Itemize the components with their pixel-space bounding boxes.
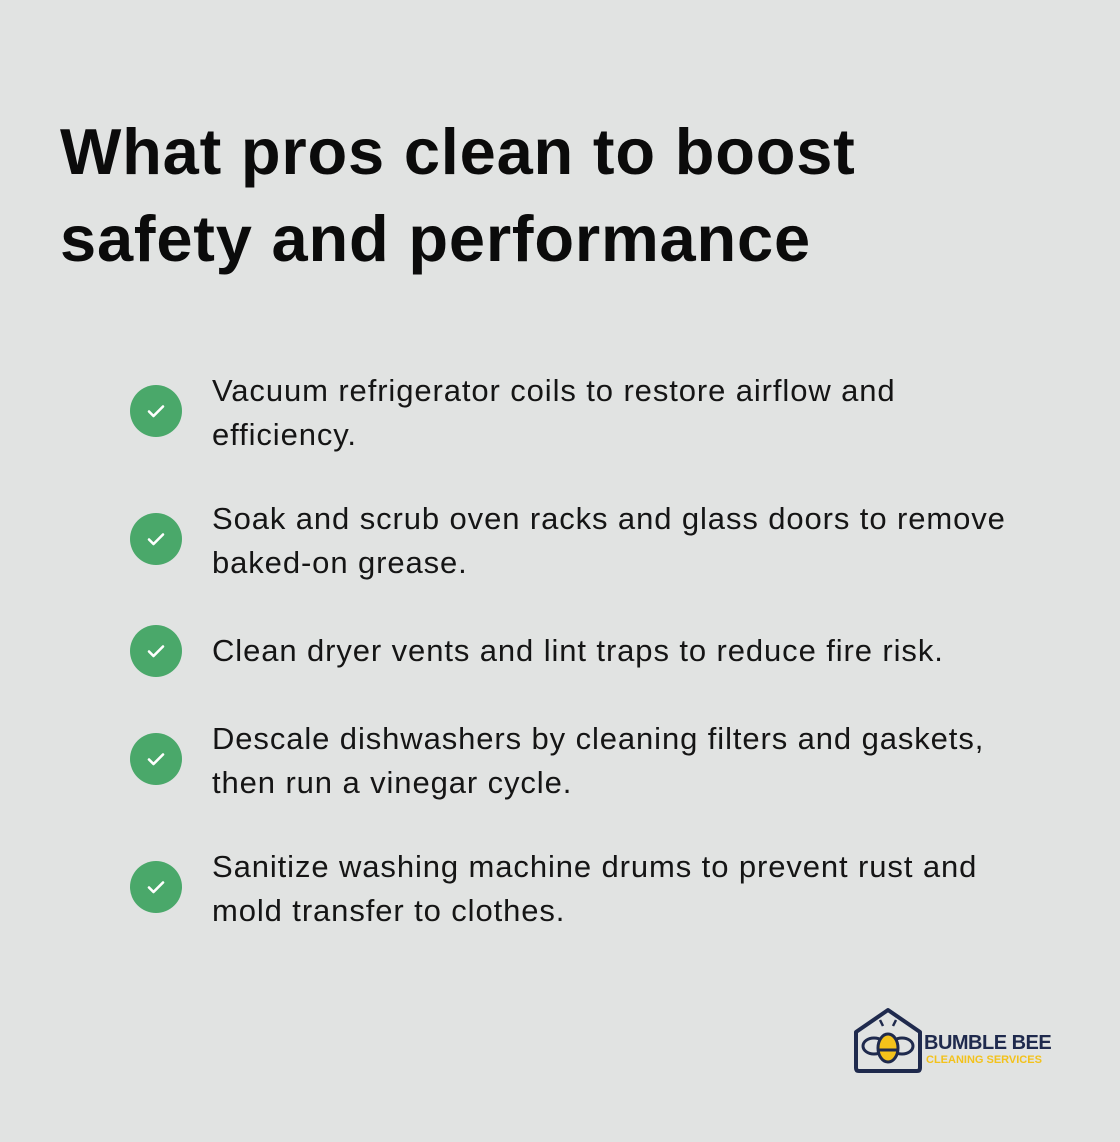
text: Soak and scrub oven racks and glass doors to remove: [212, 501, 1006, 536]
item 4: [130, 721, 984, 800]
brand text: BUMBLE BEE: [924, 1032, 1051, 1054]
icon: check: [130, 625, 182, 677]
title: What pros clean to boost: [60, 115, 856, 188]
title: safety and performance: [60, 202, 811, 275]
icon: check: [130, 513, 182, 565]
text: Vacuum refrigerator coils to restore airflow and: [212, 373, 896, 408]
text: Sanitize washing machine drums to prevent rust and: [212, 849, 977, 884]
logo: [854, 1008, 1051, 1073]
logo: CLEANING SERVICES: [926, 1054, 1042, 1066]
item 3: [130, 625, 944, 677]
text: Clean dryer vents and lint traps to reduce fire risk.: [212, 633, 944, 668]
title: [60, 115, 856, 275]
text: [212, 849, 977, 928]
icon: check: [130, 733, 182, 785]
item 5: [130, 849, 977, 928]
text: [212, 721, 984, 800]
text: Descale dishwashers by cleaning filters and gaskets,: [212, 721, 984, 756]
text: [212, 373, 896, 452]
icon: check: [130, 861, 182, 913]
text: then run a vinegar cycle.: [212, 765, 572, 800]
item 2: [130, 501, 1006, 580]
text: baked-on grease.: [212, 545, 468, 580]
icon: bee house: [854, 1008, 922, 1073]
text: efficiency.: [212, 417, 357, 452]
text: [212, 501, 1006, 580]
item 1: [130, 373, 896, 452]
text: mold transfer to clothes.: [212, 893, 565, 928]
icon: check: [130, 385, 182, 437]
